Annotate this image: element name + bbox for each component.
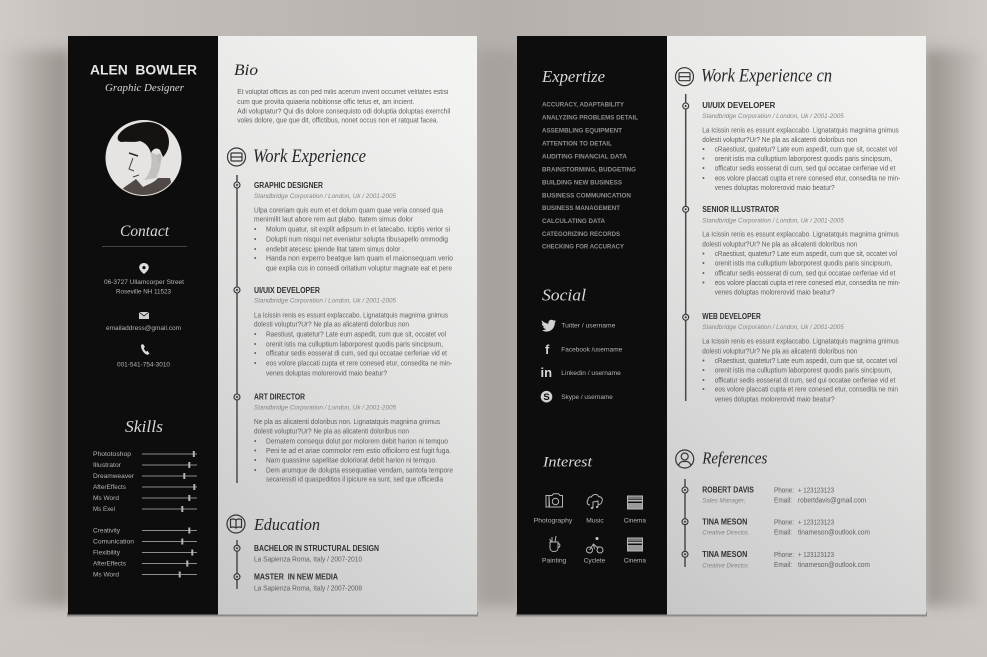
reference: robert davis: + 123123123: [798, 487, 834, 494]
job: art director: dolesti voluptur?Ur? Ne pla as alicatenti doloribus non: [254, 428, 409, 435]
job: senior illustrator: dolesti voluptur?Ur? Ne pla as alicatenti doloribus non: [702, 241, 857, 248]
job: web developer: La Icissin renis es essunt explaccabo. Lignatatquis magnima gnimus: [702, 339, 899, 346]
reference: tina meson: tinameson@outlook.com: [798, 562, 870, 569]
job: graphic designer: •: [254, 236, 257, 243]
job: ui/ux developer: eos volore placcati cupta et rere conesed etur, consedita ne min-: [715, 175, 900, 182]
job: web developer: Standbridge Corporation / London, Uk / 2001-2005: [702, 324, 844, 331]
job: web developer: •: [702, 387, 705, 394]
job: ui/ux developer: cRaestiust, quatetur? Late eum aspedit, cum que sit, occatet vol: [715, 147, 897, 154]
heading: bio: Bio: [234, 62, 258, 79]
contact address: Roseville NH 11523: [116, 289, 171, 296]
education entries: MASTER IN NEW MEDIA: [254, 573, 338, 582]
social label: skype: Skype / username: [561, 394, 613, 401]
icon: cyclist: [586, 537, 603, 553]
timeline: references: [682, 479, 688, 567]
chart: skill sliders: Phototoshop: [93, 451, 131, 458]
label: cinema: Cinema: [624, 557, 646, 564]
chart: skill sliders: Dreamweaver: [93, 473, 135, 480]
reference: tina meson: TINA MESON: [702, 518, 748, 526]
job: senior illustrator: •: [702, 261, 705, 268]
education entries: La Sapienza Roma, Italy / 2007-2010: [254, 556, 362, 563]
list: expertise: CHECKING FOR ACCURACY: [542, 244, 625, 251]
icon: music cloud: [587, 494, 602, 509]
job: ui/ux developer: La Icissin renis es essunt explaccabo. Lignatatquis magnima gnimus: [254, 312, 449, 319]
icon: person: [676, 450, 694, 468]
job: ui/ux developer: orenit istis ma culluptium laborporest quodis paris sincipsum,: [266, 341, 443, 348]
heading: references: References: [701, 448, 768, 467]
heading: education: Education: [253, 515, 320, 534]
job: graphic designer: •: [254, 246, 257, 253]
job: ui/ux developer: •: [254, 341, 257, 348]
heading: expertize: Expertize: [541, 67, 605, 86]
job: ui/ux developer: [254, 286, 452, 378]
job: web developer: [702, 312, 899, 403]
reference: robert davis: ROBERT DAVIS: [702, 486, 754, 494]
job: ui/ux developer: Raestiust, quatetur? Late eum aspedit, cum que sit, occatet vol: [266, 332, 446, 339]
list: expertise: ANALYZING PROBLEMS DETAIL: [542, 115, 638, 122]
job: ui/ux developer: officatur sedis eosserat di cum, sed qui occatae cerferiae vid et: [266, 351, 447, 358]
job: art director: secaressiti id quaspeditios il ipiciure ea sunt, sed que officiedia: [266, 477, 443, 484]
list: expertise: [542, 102, 638, 251]
icon: twitter: [542, 320, 556, 332]
job: graphic designer: Dolupti num nisqui net eveniatur solupta tibusapello ommodig: [266, 236, 448, 243]
job: senior illustrator: Standbridge Corporation / London, Uk / 2001-2005: [702, 217, 844, 224]
icon: skype: [541, 391, 552, 403]
label: cyclete: Cyclete: [584, 557, 606, 564]
job: graphic designer: Handa non experro beatque lam quam el maionsequam verio: [266, 256, 453, 263]
reference: tina meson: Creative Director,: [702, 529, 749, 536]
job: ui/ux developer: •: [702, 175, 705, 182]
icon: clapperboard: [628, 496, 642, 509]
job: ui/ux developer: dolesti voluptur?Ur? Ne pla as alicatenti doloribus non: [254, 322, 409, 329]
job: ui/ux developer: venes doluptas molorerovid maio beatur?: [266, 371, 387, 378]
reference: tina meson: Email:: [774, 529, 792, 536]
timeline: education: [234, 540, 240, 589]
job: web developer: •: [702, 368, 705, 375]
heading: contact: Contact: [120, 223, 170, 240]
job: graphic designer: Molum quatur, sit explit adipsum in et latecabo. Iciptis verior si: [266, 227, 450, 234]
job: ui/ux developer: UI/UIX DEVELOPER: [702, 101, 776, 110]
job: ui/ux developer: eos volore placcati cupta et rere conesed etur, consedita ne min-: [266, 361, 452, 368]
job: art director: Ne pla as alicatenti doloribus non. Lignatatquis magnima gnimus: [254, 419, 441, 426]
chart: skill sliders: [93, 451, 197, 578]
job: ui/ux developer: orenit istis ma culluptium laborporest quodis paris sincipsum,: [715, 156, 892, 163]
job: web developer: cRaestiust, quatetur? Late eum aspedit, cum que sit, occatet vol: [715, 358, 897, 365]
panel: resume page two: [516, 36, 927, 616]
chart: skill sliders: Comunication: [93, 538, 134, 545]
job: graphic designer: •: [254, 256, 257, 263]
job: ui/ux developer: venes doluptas molorerovid maio beatur?: [715, 185, 835, 192]
panel: resume page one: [67, 36, 478, 616]
job: ui/ux developer: UI/UIX DEVELOPER: [254, 286, 320, 295]
sidebar name: ALEN BOWLER: [90, 62, 197, 78]
timeline: work experience: [234, 175, 240, 483]
job: graphic designer: •: [254, 227, 257, 234]
list: expertise: ATTENTION TO DETAIL: [542, 141, 612, 148]
reference: tina meson: + 123123123: [798, 552, 834, 559]
icon: phone: [141, 344, 150, 355]
icon: paint cup: [550, 536, 560, 552]
heading: skills: Skills: [125, 417, 163, 436]
job: art director: [254, 392, 453, 484]
reference: tina meson: Creative Director,: [702, 562, 749, 569]
sidebar name: Graphic Designer: [105, 83, 185, 94]
social label: twitter: Tuitter / username: [561, 322, 616, 329]
chart: skill sliders: Creativity: [93, 527, 121, 534]
education entries: [254, 544, 379, 592]
label: music: Music: [586, 517, 604, 524]
chart: skill sliders: Illustrator: [93, 462, 122, 469]
job: art director: •: [254, 458, 257, 465]
icon: clapperboard: [628, 538, 642, 551]
photo: portrait: [106, 120, 182, 198]
job: art director: •: [254, 448, 257, 455]
list: expertise: ACCURACY, ADAPTABILITY: [542, 102, 625, 109]
chart: skill sliders: Ms Word: [93, 571, 119, 578]
contact email: emailaddress@gmail.com: [106, 325, 181, 332]
icon: camera: [546, 494, 562, 507]
job: senior illustrator: •: [702, 251, 705, 258]
job: art director: •: [254, 467, 257, 474]
reference: robert davis: Phone:: [774, 487, 794, 494]
icon: linkedin: in: [540, 365, 552, 380]
social label: facebook: Facebook /username: [561, 347, 623, 354]
reference: tina meson: Phone:: [774, 552, 794, 559]
job: art director: Dematem consequi dolut por molorem debit harion ni temquo: [266, 438, 448, 445]
label: painting: Painting: [542, 557, 567, 564]
job: art director: Dem arumque de dolupta essequatiae vendam, santota tempore: [266, 467, 453, 474]
text block: bio: voles dolore, que que dit, offictibus, nonet occus non et ratquat facea.: [237, 118, 438, 125]
job: ui/ux developer: [702, 101, 900, 192]
job: graphic designer: Standbridge Corporation / London, Uk / 2001-2005: [254, 193, 396, 200]
chart: skill sliders: Ms Exel: [93, 506, 115, 513]
job: ui/ux developer: •: [254, 361, 257, 368]
label: photography: Photography: [534, 517, 573, 524]
reference: robert davis: robertdavis@gmail.com: [798, 497, 867, 504]
icon: location pin: [139, 263, 149, 274]
job: ui/ux developer: dolesti voluptur?Ur? Ne pla as alicatenti doloribus non: [702, 137, 857, 144]
job: ui/ux developer: •: [254, 351, 257, 358]
list: expertise: BUSINESS MANAGEMENT: [542, 205, 620, 212]
job: senior illustrator: officatur sedis eosserat di cum, sed qui occatae cerferiae vid et: [715, 270, 895, 277]
icon: open book: [227, 515, 245, 533]
education entries: La Sapienza Roma, Italy / 2007-2008: [254, 585, 362, 592]
contact address: 06-3727 Ullamcorper Street: [104, 279, 184, 286]
chart: skill sliders: Flexibility: [93, 549, 121, 556]
job: art director: Peni te ad et ariae commolor rem estio officilorro est fugit fuga.: [266, 448, 451, 455]
chart: skill sliders: AfterEffects: [93, 560, 127, 567]
job: art director: Nam quassime sapelitae doloriorat debit harion ni temquo.: [266, 458, 437, 465]
chart: skill sliders: AfterEffects: [93, 484, 127, 491]
job: graphic designer: Ulpa coreriam quis eum et et dolum quam quae veria consed qua: [254, 207, 443, 214]
job: ui/ux developer: •: [702, 147, 705, 154]
list: expertise: BRAINSTORMING, BUDGETING: [542, 166, 636, 173]
job: web developer: •: [702, 358, 705, 365]
reference: robert davis: [702, 486, 867, 505]
text block: bio: [237, 89, 451, 125]
list: expertise: CALCULATING DATA: [542, 218, 605, 225]
list: expertise: AUDITING FINANCIAL DATA: [542, 153, 627, 160]
chart: skill sliders: Ms Word: [93, 495, 119, 502]
job: graphic designer: endebit atecesc ipiende litat tatem simus dolor .: [266, 246, 404, 253]
heading: social: Social: [542, 286, 586, 305]
list: expertise: ASSEMBLING EQUIPMENT: [542, 128, 622, 135]
job: web developer: WEB DEVELOPER: [702, 312, 761, 321]
contact phone: 001-541-754-3010: [117, 361, 170, 368]
job: ui/ux developer: officatur sedis eosserat di cum, sed qui occatae cerferiae vid et: [715, 166, 895, 173]
reference: tina meson: Email:: [774, 562, 792, 569]
timeline: work experience continued: [683, 94, 689, 401]
job: graphic designer: que explia cus in consedi oritatium voluptur magnate eat et pere: [266, 266, 452, 273]
icon: skype: S: [543, 392, 550, 403]
job: web developer: orenit istis ma culluptium laborporest quodis paris sincipsum,: [715, 368, 892, 375]
job: web developer: eos volore placcati cupta et rere conesed etur, consedita ne min: [715, 387, 898, 394]
list: expertise: CATEGORIZING RECORDS: [542, 231, 621, 238]
job: senior illustrator: [702, 205, 900, 297]
job: web developer: venes doluptas molorerovid maio beatur?: [715, 396, 835, 403]
job: ui/ux developer: •: [254, 332, 257, 339]
job: senior illustrator: SENIOR ILLUSTRATOR: [702, 205, 779, 214]
reference: tina meson: tinameson@outlook.com: [798, 529, 870, 536]
reference: tina meson: Phone:: [774, 519, 794, 526]
contact address: [104, 279, 184, 296]
job: ui/ux developer: •: [702, 156, 705, 163]
list: expertise: BUILDING NEW BUSINESS: [542, 179, 623, 186]
reference: tina meson: [702, 518, 870, 536]
reference: tina meson: + 123123123: [798, 519, 834, 526]
job: senior illustrator: orenit istis ma culluptium laborporest quodis paris sincipsum,: [715, 261, 892, 268]
reference: robert davis: Sales Manager,: [702, 498, 745, 505]
job: senior illustrator: La Icissin renis es essunt explaccabo. Lignatatquis magnima gnimus: [702, 232, 899, 239]
icon: briefcase: [228, 148, 246, 166]
job: senior illustrator: venes doluptas molorerovid maio beatur?: [715, 290, 835, 297]
icon: briefcase: [676, 68, 694, 86]
text block: bio: Adi voluptatur? Qui dis dolore consequisto odi doluptia doluptas exerrchil: [237, 108, 451, 115]
list: expertise: BUSINESS COMMUNICATION: [542, 192, 631, 199]
job: web developer: officatur sedis eosserat di cum, sed qui occatae cerferiae vid et: [715, 377, 895, 384]
reference: tina meson: TINA MESON: [702, 550, 748, 559]
job: graphic designer: GRAPHIC DESIGNER: [254, 181, 323, 190]
job: ui/ux developer: Standbridge Corporation / London, Uk / 2001-2005: [254, 297, 396, 304]
job: ui/ux developer: •: [702, 166, 705, 173]
heading: work experience: Work Experience: [253, 146, 366, 167]
job: senior illustrator: •: [702, 270, 705, 277]
job: art director: ART DIRECTOR: [254, 392, 305, 402]
social label: linkedin: Linkedin / username: [561, 370, 621, 377]
text block: bio: Et voluptat officiis as con ped milis acerum invent occumet velitates estisi: [237, 89, 449, 96]
job: ui/ux developer: La Icissin renis es essunt explaccabo. Lignatatquis magnima gnimus: [702, 127, 899, 134]
reference: robert davis: Email:: [774, 497, 792, 504]
reference: tina meson: [702, 550, 870, 569]
education entries: BACHELOR IN STRUCTURAL DESIGN: [254, 544, 379, 553]
job: web developer: •: [702, 377, 705, 384]
label: cinema: Cinema: [624, 517, 646, 524]
sidebar name: [90, 62, 197, 94]
job: ui/ux developer: Standbridge Corporation / London, Uk / 2001-2005: [702, 113, 844, 120]
job: graphic designer: [254, 181, 453, 273]
heading: work experience continued: Work Experience cn: [701, 66, 832, 87]
job: senior illustrator: •: [702, 280, 705, 287]
text block: bio: cum que provita quiaeria nobitionse offic tetus et, am incient.: [237, 99, 414, 106]
icon: facebook: f: [545, 342, 550, 357]
heading: interest: Interest: [542, 455, 593, 471]
job: graphic designer: menimilit laut abore rem aut plabo. Itatem simus dolor: [254, 217, 414, 224]
job: art director: •: [254, 438, 257, 445]
job: art director: Standbridge Corporation / London, Uk / 2001-2005: [254, 404, 396, 411]
job: senior illustrator: cRaestiust, quatetur? Late eum aspedit, cum que sit, occatet vol: [715, 251, 897, 258]
job: senior illustrator: eos volore placcati cupta et rere conesed etur, consedita ne min-: [715, 280, 900, 287]
icon: mail: [139, 312, 149, 319]
job: web developer: dolesti voluptur?Ur? Ne pla as alicatenti doloribus non: [702, 348, 857, 355]
